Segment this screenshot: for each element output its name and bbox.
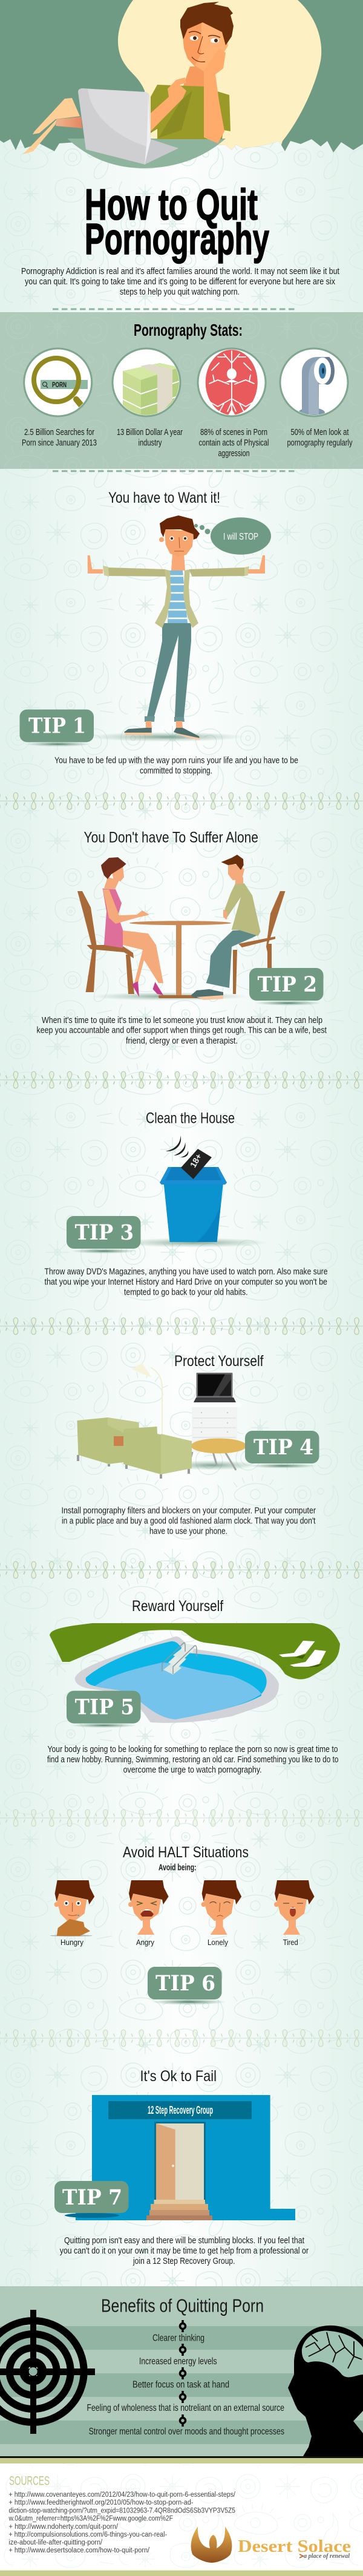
tip 1 text: committed to stopping. [140,766,212,776]
building [92,2095,270,2209]
illustration: man saying stop [88,515,265,740]
heading: tip 3: Clean the House [146,1110,235,1127]
icon: money stacks [113,348,180,422]
face: lonely [201,1880,241,1935]
laptop [78,88,178,165]
stats heading: Pornography Stats: [134,321,243,339]
intro text: steps to help you quit watching porn. [120,287,240,297]
title [85,181,269,264]
logo: Desert Solace: Desert Solace [238,2537,351,2556]
legs [23,98,82,154]
laptop [194,1373,236,1402]
left chair [77,891,134,994]
stat label [287,427,353,448]
tip 3 text [45,1267,328,1298]
benefit list: Feeling of wholeness that is notreliant on an external source [87,2403,284,2413]
face labels [60,1938,298,1947]
title: Pornography [85,215,269,264]
benefit list: Clearer thinking [152,2333,204,2343]
sources heading: SOURCES [9,2474,50,2488]
sources list: + http://www.covenanteyes.com/2012/04/23/how-to-quit-porn-6-essential-steps/ [8,2491,236,2499]
steps [146,2200,212,2220]
sources list: w.0&utm_referrer=https%3A%2F%2Fwww.google.com%2F [8,2516,173,2523]
face: angry [128,1880,169,1935]
shirt [168,570,188,623]
hands [88,555,265,574]
sources list: + http://www.ndoherty.com/quit-porn/ [8,2523,119,2531]
man [151,2,234,143]
title: How to Quit [85,181,258,229]
right chair [233,891,286,994]
face labels: Lonely [208,1938,228,1947]
tip 5 badge [67,1691,140,1728]
thought bubble: I will STOP: I will STOP [223,532,258,542]
ground shadow: tip 3 [118,1238,269,1247]
benefit list [87,2320,284,2437]
benefit list: Better focus on task at hand [132,2380,229,2390]
jacket [103,566,249,628]
header illustration [0,0,363,168]
stat: industry [113,348,183,448]
panel: pornography stats [0,312,363,469]
heading: tip 1: You have to Want it! [108,489,220,506]
stat label: industry [138,438,162,448]
icon: periscope eye [280,348,348,417]
coffee table [190,1439,247,1470]
heading: tip 2: You Don't have To Suffer Alone [83,829,258,846]
tip 4 text: have to use your phone. [149,1526,227,1537]
table [129,921,231,998]
tip 7 badge [54,2181,128,2218]
sources list [8,2491,236,2554]
sources list: + http://www.desertsolace.com/how-to-quit-porn/ [8,2547,150,2554]
pool water [86,1641,267,1719]
illustration: two people at a table [77,855,286,1000]
sources list: ize-about-life-after-quitting-porn/ [8,2539,103,2546]
head [159,515,200,570]
tip 1 badge: TIP 1 [28,714,86,739]
ground shadow: tip 1 [88,732,245,742]
tip 5 text: overcome the urge to watch pornography. [123,1765,262,1775]
icon: target [0,2310,95,2434]
face: tired [274,1880,315,1935]
tip 1 text: You have to be fed up with the way porn ruins your life and you have to be [54,756,298,766]
heading: tip 4: Protect Yourself [174,1353,264,1370]
benefit list: Increased energy levels [139,2356,217,2367]
face labels: Tired [283,1938,298,1947]
icon: magnifier [24,348,92,416]
stat label [117,427,183,448]
stat label [22,427,97,448]
tip 7 text [60,2235,309,2266]
illustration: trash bin with DVD [160,1136,227,1242]
tip 3 badge: TIP 3 [75,1220,134,1245]
face labels: Angry [136,1938,154,1947]
pool rim [75,1636,279,1723]
benefit list: Stronger mental control over moods and thought processes [89,2427,284,2437]
icon: magnifier: PORN [52,381,67,389]
door [154,2122,206,2202]
illustration: trash bin with DVD: 18+ [188,1152,203,1169]
illustration: recovery group door [76,2095,295,2220]
tip 4 text [62,1506,316,1537]
header backdrop [0,0,363,157]
lawn [50,1623,340,1679]
tip 6 badge: TIP 6 [155,1971,215,1996]
ground shadow: tip 2 [91,992,248,1001]
stat: searches [22,348,97,448]
ground shadow: tip 4 [166,1460,257,1470]
lounge chairs [279,1641,326,1667]
dresser [186,1402,242,1452]
stat label: 2.5 Billion Searches for [24,427,94,437]
stat label: 13 Billion Dollar A year [117,427,183,437]
logo: Desert Solace: a place of renewal [304,2553,350,2560]
heading: tip 7: It's Ok to Fail [140,2068,217,2085]
tip 5 badge: TIP 5 [75,1695,134,1720]
tip 5 text [47,1744,339,1775]
tip 2 badge: TIP 2 [258,972,317,997]
face: hungry [50,1880,94,1937]
icon: head with brain [288,2326,363,2456]
illustration: living room [77,1363,247,1479]
sources list: diction-stop-watching-porn/?utm_expid=81032963-7.4QR8ndOdS6Sb3VYP3V5Z5 [8,2507,235,2514]
tip 7 text: join a 12 Step Recovery Group. [132,2256,235,2266]
face labels: Hungry [60,1938,83,1947]
tip 7 text: Quitting porn isn't easy and there will be stumbling blocks. If you feel that [64,2235,305,2246]
heading: tip 5: Reward Yourself [132,1598,223,1615]
tip 4 badge [245,1431,319,1468]
stat label: contain acts of Physical [198,438,269,448]
subheading: avoid being: Avoid being: [159,1863,196,1873]
tip 2 text [36,1015,327,1046]
tip 6 badge [148,1967,226,2005]
tip 2 badge [249,968,323,1005]
heading: tip 6: Avoid HALT Situations [123,1844,249,1861]
tip 7 text: you can't do it on your own it may be time to get help from a professional or [60,2246,309,2256]
floor lamp [132,1363,162,1434]
tip 2 text: friend, clergy or even a therapist. [126,1036,238,1046]
thought bubble: I will STOP [194,517,271,555]
stat label [198,427,269,459]
back armchair [77,1417,139,1466]
sources list: + http://www.feedtherightwolf.org/2010/05/how-to-stop-porn-ad- [8,2499,194,2506]
icon: brain [198,348,266,416]
tip 1 badge [19,710,94,747]
pants [147,623,191,717]
sign text: 12 Step Recovery Group [148,2104,213,2116]
tip 3 text: tempted to go back to your old habits. [124,1287,248,1298]
stat label: 88% of scenes in Porn [200,427,267,437]
tip 7 badge: TIP 7 [62,2185,122,2210]
stat label: aggression [218,448,249,459]
tip 3 badge [67,1216,140,1254]
front armchair [123,1427,192,1479]
stat label: Porn since January 2013 [22,438,97,448]
heading: benefits: Benefits of Quitting Porn [101,2295,264,2316]
intro text [21,266,340,297]
shoes [124,728,200,740]
tip 1 text [54,756,298,776]
man seated [191,855,260,1000]
tip 4 badge: TIP 4 [253,1435,313,1460]
logo: Desert Solace [191,2526,351,2563]
panel: benefits of quitting [0,2286,363,2456]
panel: sources footer [0,2456,363,2576]
stat: men [280,348,353,448]
pool ladder [162,1643,197,1675]
woman [101,857,163,997]
table surface [67,139,226,168]
motion arcs [166,1136,188,1157]
tip 4 text: Install pornography filters and blockers on your computer. Put your computer [62,1506,316,1516]
illustration: swimming pool [50,1623,340,1723]
stat: aggression [198,348,269,459]
sources list: + http://compulsionsolutions.com/6-things-you-can-real- [8,2531,167,2538]
